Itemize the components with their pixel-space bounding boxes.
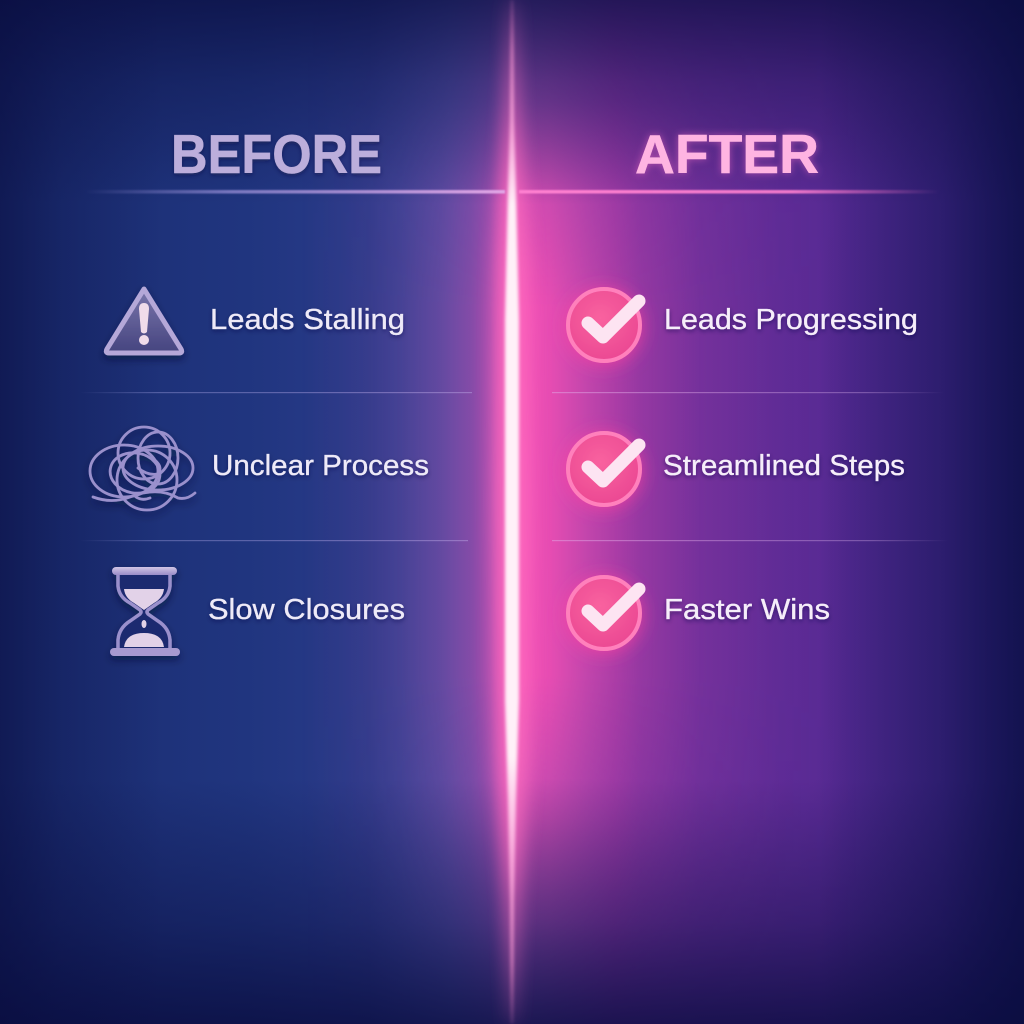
panel: before	[90, 289, 429, 656]
row divider: left 1	[80, 392, 472, 393]
row divider: right 1	[552, 392, 944, 393]
row divider: left 2	[80, 540, 468, 541]
icon: check 3	[568, 577, 640, 649]
label: leads stalling: Leads Stalling	[210, 304, 405, 336]
icon: warning triangle	[106, 289, 182, 353]
label: streamlined steps: Streamlined Steps	[663, 450, 905, 482]
label: unclear process: Unclear Process	[212, 450, 429, 482]
label: faster wins: Faster Wins	[664, 594, 830, 626]
icon: check 1	[568, 289, 640, 361]
icon: check 2	[568, 433, 640, 505]
heading: after: AFTER	[635, 123, 819, 185]
header rule: before	[85, 190, 505, 194]
glowing center divider beam	[494, 0, 530, 1024]
label: leads progressing: Leads Progressing	[664, 304, 918, 336]
panel: after	[568, 289, 918, 649]
icon: tangled scribble	[90, 427, 195, 510]
label: slow closures: Slow Closures	[208, 594, 405, 626]
row divider: right 2	[552, 540, 948, 541]
icon: hourglass	[110, 567, 180, 656]
heading: before: BEFORE	[171, 123, 382, 185]
header rule: after	[519, 190, 939, 194]
